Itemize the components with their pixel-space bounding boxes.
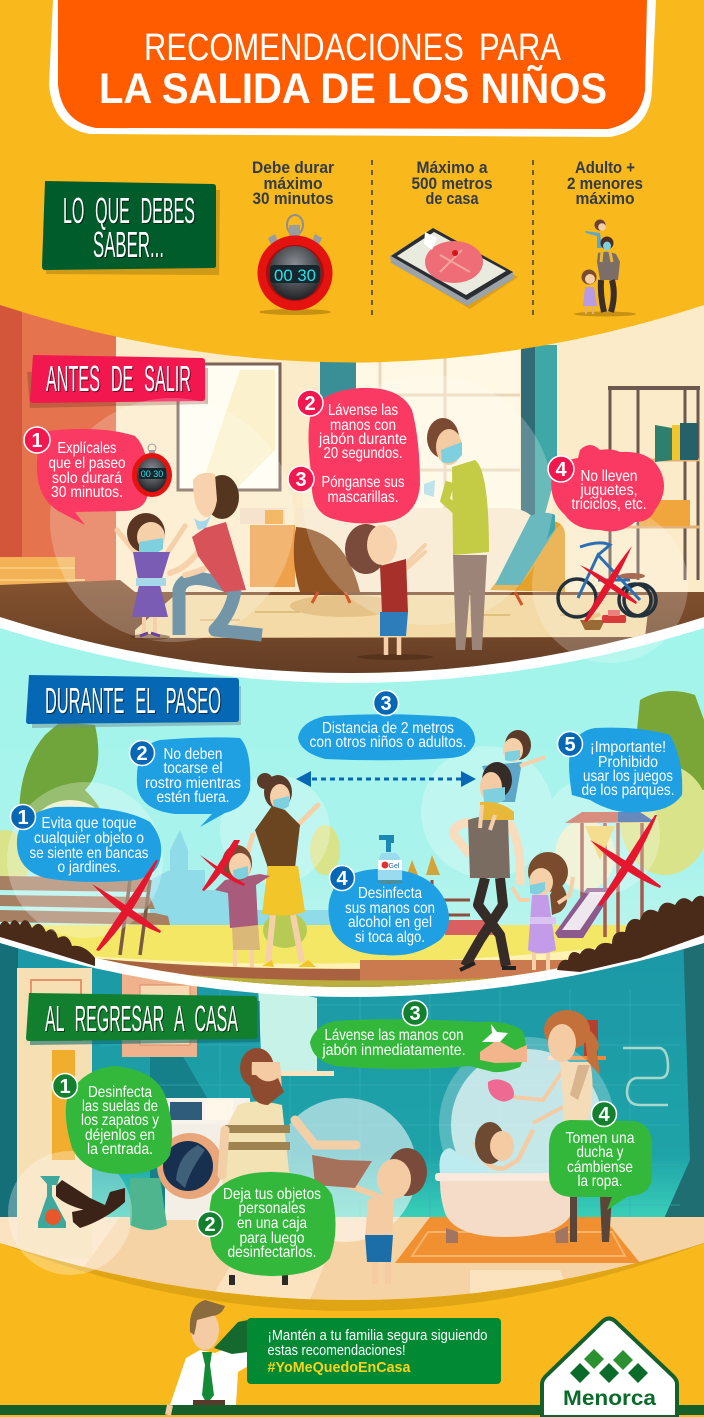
bubble 5: importante [558,728,682,906]
bubble 3: distancia: Distancia de 2 metros [322,720,454,737]
bubble 2: no deben: rostro mientras [145,775,241,792]
bubble 4: tomen una ducha: cámbiense [567,1159,633,1176]
number 5 [558,732,582,756]
number 3 [402,1000,428,1026]
bubble 2: deja tus objetos: Deja tus objetos [223,1186,321,1203]
key fact: distancia: Máximo a [416,159,488,177]
bubble 2: no deben [130,737,250,827]
footer strip [0,1405,704,1415]
number 4: 4 [598,1104,610,1126]
scene: translucent circles [50,375,688,663]
top yellow area [0,0,704,362]
panel: lo que debes saber: SABER... [93,224,164,265]
bubble 2 and 3: lávense, mascarillas: jabón durante [318,431,407,448]
bubble 4: desinfecta: alcohol en gel [348,914,432,931]
bubble 1: explícales [24,427,172,525]
icon: red cross on bench [92,860,161,951]
bubble 1: evita: o jardines. [58,859,120,876]
person: mother in yellow skirt [246,773,318,967]
bubble 1: evita [10,804,161,951]
number 1: 1 [59,1076,71,1098]
key fact: distancia: de casa [426,190,479,208]
bubble 2: deja tus objetos: desinfectarlos. [228,1244,316,1261]
panel: lo que debes saber [42,181,220,275]
title: LA SALIDA DE LOS NIÑOS [99,65,607,113]
bubble 4: desinfecta [328,866,449,955]
number 2: 2 [204,1214,216,1236]
scene: park trees and playground [0,691,704,948]
number 2: 2 [136,743,148,765]
bubble 2: deja tus objetos: personales [238,1200,306,1217]
bubble 2: no deben: estén fuera. [156,789,230,806]
bubble 1: explícales: 30 minutos. [51,484,123,501]
icon: stopwatch [258,215,332,315]
key fact: distancia: 500 metros [412,175,492,193]
bubble 4: no lleven juguetes: triciclos, etc. [572,496,646,513]
number 5: 5 [564,734,576,756]
bubble 5: importante: Prohibido [598,754,658,771]
panel: lo que debes saber: LO QUE DEBES [63,190,195,231]
person: child in tub [475,1122,533,1168]
bubble 1: evita: se siente en bancas [30,845,148,862]
icon: sponge [488,1079,514,1102]
bubble 2: deja tus objetos: en una caja [237,1215,307,1232]
icon: washing hands [480,1024,527,1063]
number 3: 3 [380,693,392,715]
person: father with mask [424,418,489,650]
callout: final message: ¡Mantén a tu familia segura siguiendo [268,1327,488,1344]
icon: shoes and spray bottle [38,1176,125,1228]
bubble 2 and 3: lávense, mascarillas: 20 segundos. [324,445,402,462]
bubble 1: desinfecta las suelas: déjenlos en [85,1127,155,1144]
logo: menorca [542,1318,677,1417]
header banner [49,0,656,137]
bubble 4: tomen una ducha: ducha y [576,1144,624,1161]
person: mother bathing child [488,1010,612,1242]
person: girl in lilac dress [512,852,573,970]
key fact: personas [567,159,643,316]
section background: durante el paseo [0,617,704,987]
bubble 2: deja tus objetos [198,1172,336,1276]
bubble 3: lávense inmediatamente: jabón inmediatamente. [322,1042,466,1059]
text: AL REGRESAR A CASA [45,998,238,1039]
bubble 1: desinfecta las suelas: la entrada. [87,1141,153,1158]
key fact: personas: máximo [576,190,634,208]
bubble 3: distancia: con otros niños o adultos. [310,734,466,751]
number 3: 3 [295,469,307,491]
white divider under section 2 [0,932,704,997]
heading: al regresar a casa [26,993,260,1045]
number 1 [10,804,36,830]
section background: al regresar a casa [0,943,704,1311]
number 4: 4 [336,868,348,890]
bubble 3: lávense inmediatamente: Lávense las manos con [324,1027,464,1044]
bubble 2 and 3: lávense, mascarillas: Lávense las [328,402,398,419]
white divider under section 1 [0,617,704,683]
person: mother kneeling [170,473,262,635]
bubble 1: explícales: Explícales [58,440,116,457]
bubble 4: desinfecta: sus manos con [345,900,435,917]
person: father with child on shoulders [454,730,545,970]
bubble 4: no lleven juguetes: No lleven [580,468,638,485]
scene: bench [0,876,170,955]
bubble 4: tomen una ducha [549,1102,652,1210]
divider lines between key facts [372,160,533,316]
bubble 1: desinfecta las suelas [52,1066,172,1174]
scene: translucent circles home [8,1037,615,1275]
person: father with beard [222,1048,356,1285]
number 1: 1 [31,430,43,452]
person: boy with box [312,1148,427,1284]
bubble 2: deja tus objetos: para luego [240,1230,305,1247]
number 3 [374,690,398,716]
number 2: 2 [304,393,316,415]
person: child with mask [200,840,270,967]
logo: menorca: Menorca [563,1387,656,1410]
bubble 4: desinfecta: Desinfecta [358,885,422,902]
key fact: duración: Debe durar [252,159,335,177]
scene: towel rack [623,1048,668,1105]
bubble 3: distancia [298,690,475,760]
heading: antes de salir [27,355,208,408]
bubble 4: tomen una ducha: la ropa. [578,1173,622,1190]
arrow: distance [296,771,476,787]
bubble 2: no deben: tocarse el [164,760,222,777]
key fact: distancia [390,159,518,309]
scene: rug and bathtub [395,1148,640,1263]
icon: red cross on playground [590,815,661,906]
person: man with megaphone [168,1300,250,1415]
icon: small stopwatch [132,444,172,497]
bubble 1: explícales: solo durará [52,470,122,487]
icon: hand sanitizer: Gel [389,863,400,870]
icon: hand sanitizer [377,835,403,884]
bubble 1: desinfecta las suelas: los zapatos y [81,1112,159,1129]
bubble 2: no deben: No deben [164,746,222,763]
scene: washing machine [130,1098,250,1230]
bubble 3: lávense inmediatamente [310,1000,527,1072]
bubble 2 and 3: lávense, mascarillas: manos con [330,417,396,434]
scene: translucent circles park [7,746,660,938]
key fact: duración: máximo [264,175,322,193]
key fact: personas: Adulto + [575,159,635,177]
icon: box [312,1155,372,1188]
number 1 [24,427,50,453]
person: boy [345,524,433,660]
bubble 4: no lleven juguetes [548,445,664,531]
bubble 1: desinfecta las suelas: las suelas de [82,1098,158,1115]
icon: megaphone [214,1320,248,1354]
title [99,27,607,113]
key fact: duración [252,159,335,315]
icon: stopwatch: 00 30 [274,266,316,285]
number 1: 1 [17,807,29,829]
bubble 2 and 3: lávense, mascarillas [288,388,420,524]
number 3: 3 [409,1003,421,1025]
key fact: personas: 2 menores [567,175,643,193]
scene: bushes [0,896,704,972]
key fact: duración: 30 minutos [252,190,334,208]
heading: durante el paseo: DURANTE EL PASEO [45,680,221,721]
callout: final message: estas recomendaciones! [268,1342,406,1359]
bubble 4: tomen una ducha: Tomen una [566,1130,635,1147]
bubble 1: explícales: que el paseo [48,455,126,472]
bubble 4: desinfecta: si toca algo. [355,929,425,946]
icon: toys with red cross [558,543,656,630]
heading: antes de salir: ANTES DE SALIR [46,358,191,399]
heading: durante el paseo [26,675,241,728]
bubble 2 and 3: lávense, mascarillas: mascarillas. [328,489,398,506]
bubble 5: importante: de los parques. [582,782,674,799]
bubble 1: evita: Evita que toque [42,815,137,832]
bubble 5: importante: usar los juegos [583,768,673,785]
callout: final message [247,1318,501,1384]
callout: final message: #YoMeQuedoEnCasa [268,1359,411,1376]
icon: phone map [390,228,518,309]
icon: family [574,220,636,316]
section background: antes de salir [0,295,704,700]
number 4: 4 [555,459,567,481]
bubble 1: evita: cualquier objeto o [34,830,144,847]
title: RECOMENDACIONES PARA [144,27,562,69]
bubble 4: no lleven juguetes: juguetes, [580,482,638,499]
bubble 1: desinfecta las suelas: Desinfecta [88,1084,152,1101]
person: girl with mask [117,513,185,640]
icon: small stopwatch: 00 30 [141,469,163,479]
bubble 5: importante: ¡Importante! [590,739,666,756]
bubble 2 and 3: lávense, mascarillas: Pónganse sus [322,474,404,491]
